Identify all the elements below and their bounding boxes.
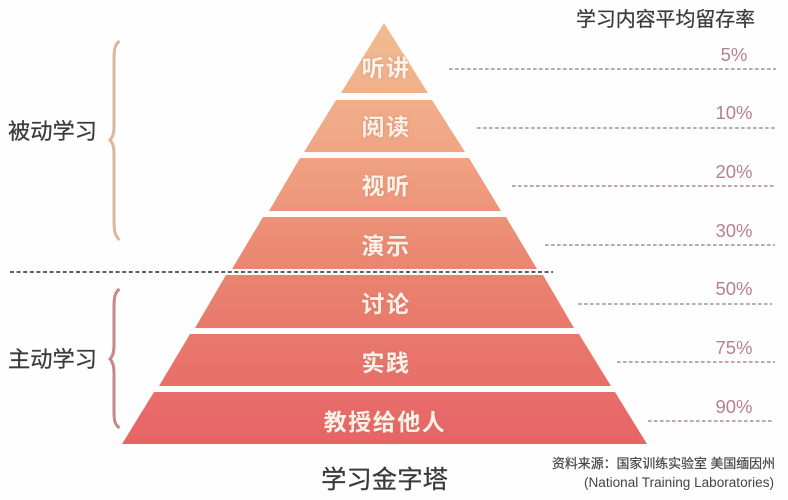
label: passive learning: 被动学习 (8, 119, 97, 144)
retention: 75%: 75% (715, 337, 753, 358)
heading: retention rate: 学习内容平均留存率 (576, 8, 755, 31)
layer: 演示: 演示 (362, 233, 410, 259)
title: 学习金字塔 (321, 466, 448, 494)
layer: 教授给他人 (122, 392, 647, 444)
retention: 10%: 10% (715, 102, 753, 123)
retention: 90%: 90% (715, 396, 753, 417)
divider: passive and active learning (10, 271, 553, 273)
source note: (National Training Laboratories) (584, 475, 774, 490)
layer: 阅读: 阅读 (362, 114, 410, 140)
pyramid (122, 23, 647, 444)
brace: active learning (110, 289, 120, 428)
retention: 90% (648, 396, 772, 421)
label: active learning: 主动学习 (8, 347, 97, 372)
layer: 听讲 (341, 23, 428, 93)
brace: passive learning (110, 41, 120, 240)
retention: 30%: 30% (715, 220, 753, 241)
retention: 20%: 20% (715, 161, 753, 182)
source note: 资料来源：国家训练实验室 美国缅因州 (552, 456, 775, 471)
layer: 讨论: 讨论 (362, 291, 410, 317)
layer: 阅读 (304, 100, 465, 152)
layer: 演示 (232, 217, 537, 269)
source note (552, 456, 775, 490)
layer: 视听 (269, 158, 501, 211)
layer: 听讲: 听讲 (362, 55, 410, 81)
layer: 教授给他人: 教授给他人 (324, 409, 446, 435)
retention: 50%: 50% (715, 278, 753, 299)
layer: 视听: 视听 (362, 173, 410, 199)
layer: 讨论 (195, 275, 574, 328)
retention: 5%: 5% (721, 44, 747, 65)
layer: 实践 (159, 334, 611, 386)
layer: 实践: 实践 (362, 350, 410, 376)
